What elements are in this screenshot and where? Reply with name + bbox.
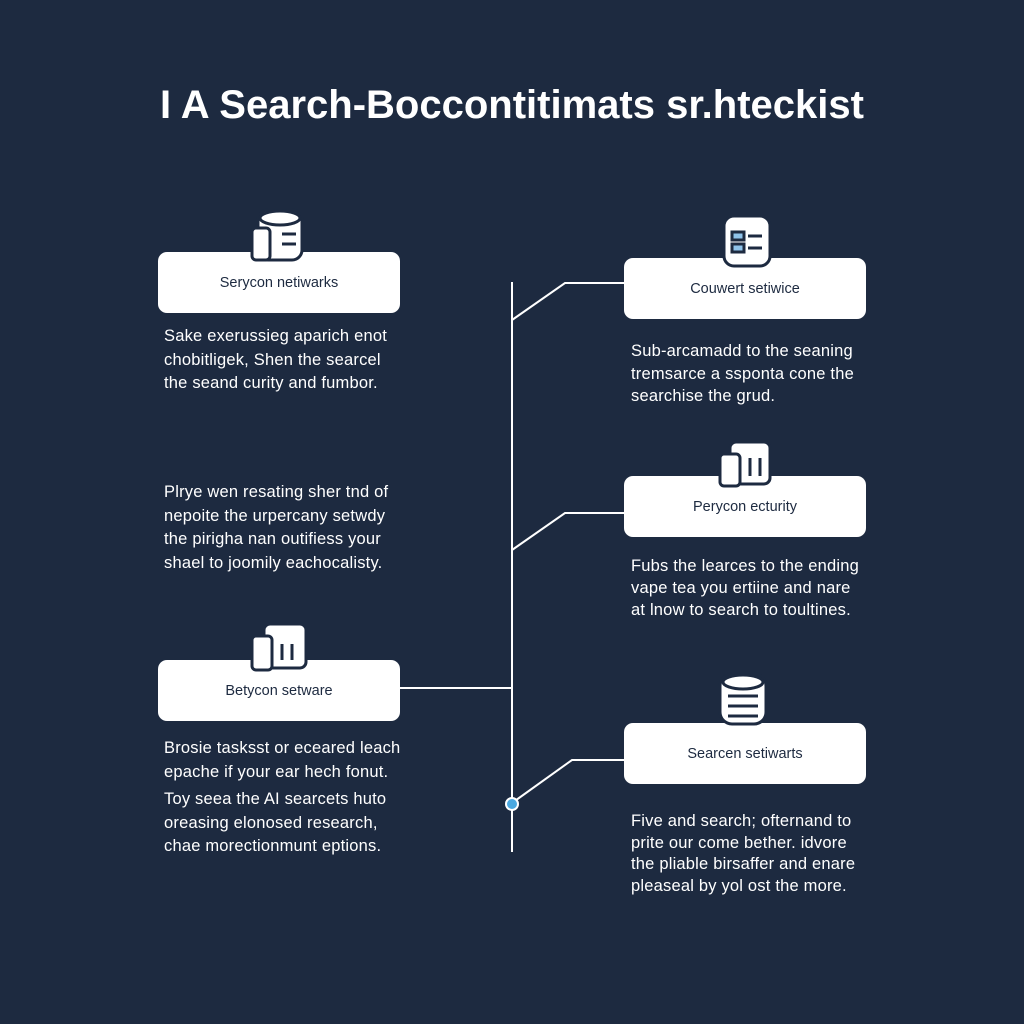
- text block 5: [631, 557, 859, 619]
- text block 5: Fubs the learces to the ending: [631, 557, 859, 575]
- text block 3: chae morectionmunt eptions.: [164, 837, 381, 855]
- title: I A Search-Boccontitimats sr.hteckist: [160, 83, 864, 127]
- icon: database 1: [250, 212, 304, 262]
- text block 1: [164, 327, 387, 392]
- box: Perycon ecturity: Perycon ecturity: [693, 498, 797, 514]
- text block 4: searchise the grud.: [631, 387, 775, 405]
- box: Serycon netiwarks: [158, 252, 400, 313]
- text block 3: Toy seea the AI searcets huto: [164, 790, 386, 808]
- text block 6: [631, 812, 855, 894]
- icon: document 4: [722, 218, 772, 268]
- box: Perycon ecturity: [624, 476, 866, 537]
- box: Serycon netiwarks: Serycon netiwarks: [220, 274, 338, 290]
- text block 2: the pirigha nan outifiess your: [164, 530, 381, 548]
- box: Searcen setiwarts: Searcen setiwarts: [687, 746, 803, 762]
- text block 4: Sub-arcamadd to the seaning: [631, 342, 853, 360]
- box: Betycon setware: Betycon setware: [225, 682, 333, 698]
- text block 4: tremsarce a ssponta cone the: [631, 364, 854, 382]
- box: Couwert setiwice: Couwert setiwice: [690, 280, 800, 296]
- box: Betycon setware: [158, 660, 400, 721]
- icon: database 6: [722, 676, 764, 726]
- text block 6: pleaseal by yol ost the more.: [631, 876, 847, 894]
- text block 1: the seand curity and fumbor.: [164, 374, 378, 392]
- text block 1: chobitligek, Shen the searcel: [164, 350, 381, 368]
- text block 6: prite our come bether. idvore: [631, 834, 847, 852]
- text block 1: Sake exerussieg aparich enot: [164, 327, 387, 345]
- icon: files 5: [718, 444, 772, 488]
- text block 3: Brosie tasksst or eceared leach: [164, 739, 400, 757]
- text block 2: shael to joomily eachocalisty.: [164, 554, 382, 572]
- box: Couwert setiwice: [624, 258, 866, 319]
- text block 3: oreasing elonosed research,: [164, 814, 378, 832]
- text block 6: Five and search; ofternand to: [631, 812, 851, 830]
- text block 2: nepoite the urpercany setwdy: [164, 506, 385, 524]
- text block 5: at lnow to search to toultines.: [631, 601, 851, 619]
- text block 2: [164, 483, 388, 572]
- box: Searcen setiwarts: [624, 723, 866, 784]
- text block 3: epache if your ear hech fonut.: [164, 762, 388, 780]
- text block 5: vape tea you ertiine and nare: [631, 579, 851, 597]
- text block 2: Plrye wen resating sher tnd of: [164, 483, 388, 501]
- text block 4: [631, 342, 854, 405]
- text block 6: the pliable birsaffer and enare: [631, 855, 855, 873]
- icon: files 3: [250, 626, 308, 672]
- text block 3: [164, 739, 400, 855]
